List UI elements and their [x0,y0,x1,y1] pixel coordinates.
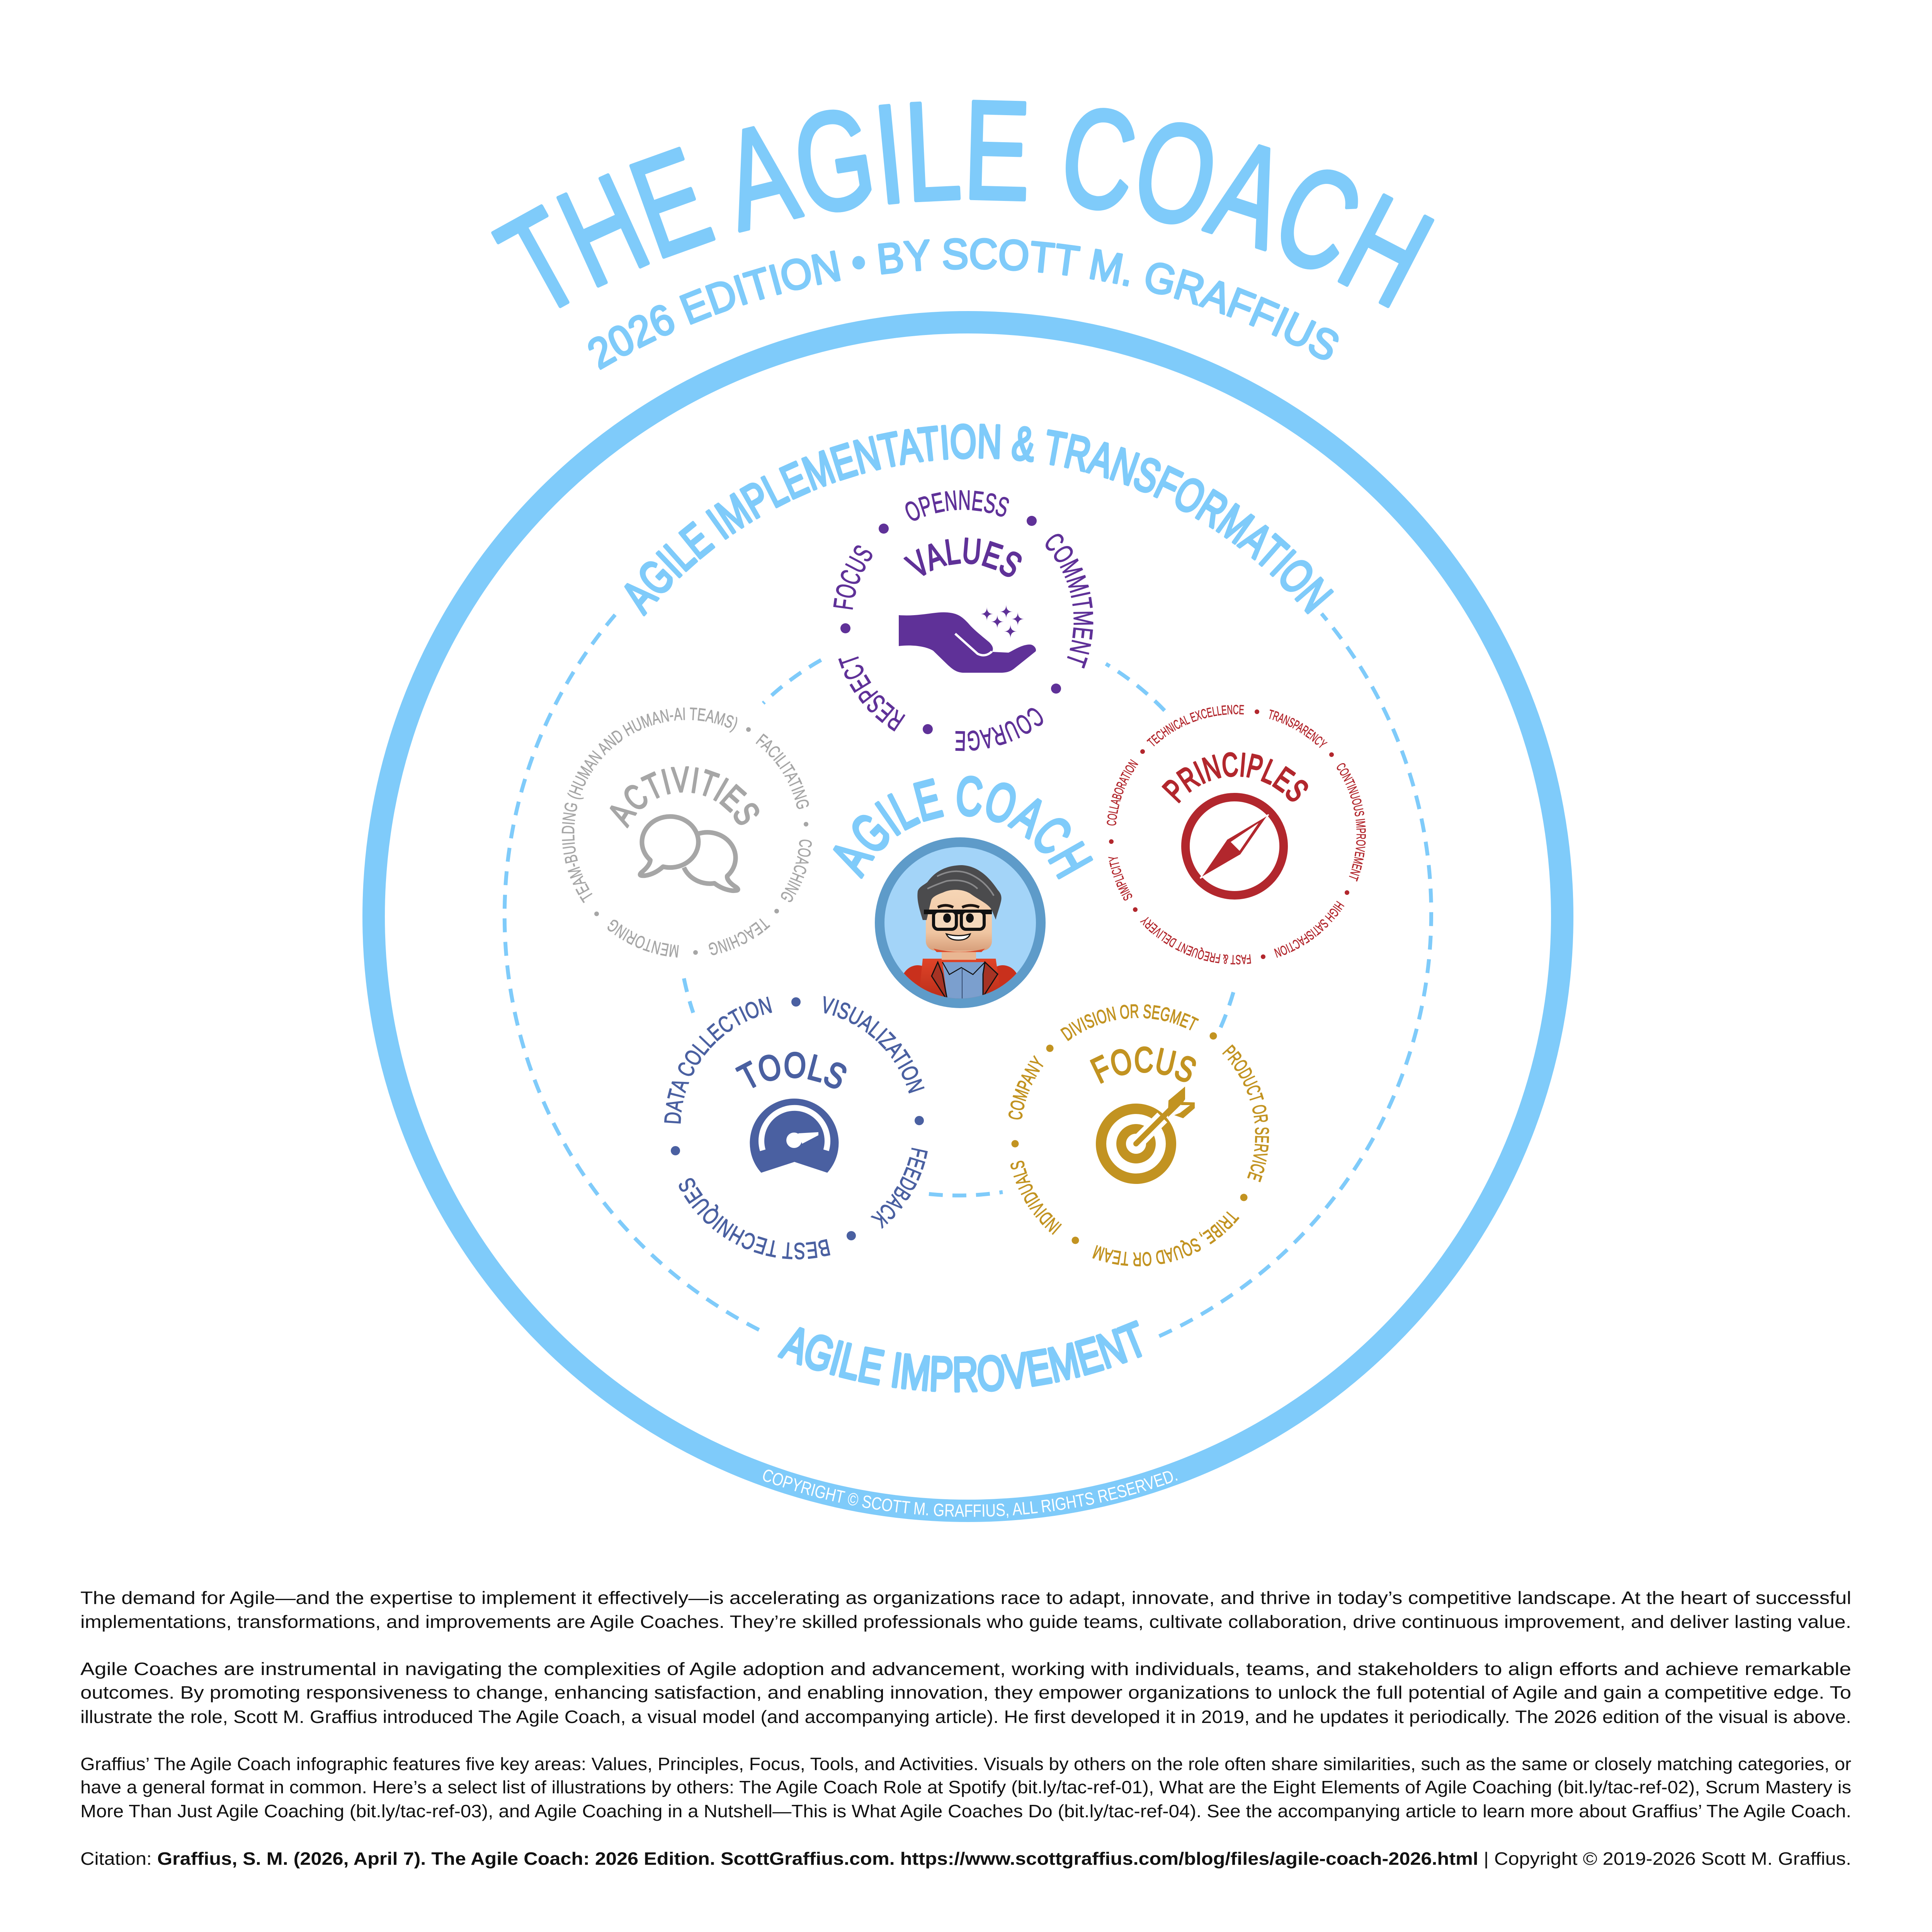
subtitle: 2026 EDITION • BY SCOTT M. GRAFFIUS [579,226,1347,378]
principle: fast and frequent delivery: FAST & FREQUENT DELIVERY [1133,911,1257,980]
tool: visualization: VISUALIZATION [810,977,943,1104]
activity: mentoring: MENTORING [600,913,685,968]
principle: collaboration: COLLABORATION [1100,755,1142,830]
focus: division or segment: DIVISION OR SEGMET [1056,995,1202,1046]
tool: best techniques: BEST TECHNIQUES [660,1167,841,1288]
avatar: agile coach figure [875,837,1046,1008]
heading: agile implementation and transformation: AGILE IMPLEMENTATION & TRANSFORMATION [612,415,1342,622]
icon: compass [1185,797,1284,895]
dashed circle: outer path [505,614,1431,1336]
heading: agile improvement: AGILE IMPROVEMENT [774,1312,1154,1403]
value: openness: OPENNESS [900,482,1014,529]
heading: principles: PRINCIPLES [1156,746,1315,809]
separator dots [1109,709,1349,959]
text block: paragraph 2 [80,1659,1851,1727]
icon: open hand with sparkles [899,605,1036,673]
text block: paragraph 3: More Than Just Agile Coaching (bit.ly/tac-ref-03), and Agile Coaching in a Nutshell—This is What Agile Coaches Do (bit.ly/tac-ref-04). See the accompanying article to learn more about Graffius’ The Agile Coach. [80,1801,1851,1821]
panel: focus [1000,995,1285,1286]
panel: tools [637,973,943,1288]
separator dots [671,997,924,1240]
dashed connectors between areas [684,660,1236,1196]
icon: gauge [750,1099,838,1173]
value: commitment: COMMITMENT [1035,523,1110,676]
text block: paragraph 1: implementations, transformations, and improvements are Agile Coaches. They’re skilled professionals who guide teams, cultivate collaboration, drive continuous improvement, and deliver lasting value. [80,1612,1851,1632]
focus: product or service: PRODUCT OR SERVICE [1216,1037,1285,1188]
icon: target with arrow [1101,1087,1195,1179]
tool: feedback: FEEDBACK [863,1139,940,1237]
focus: tribe, squad or team: TRIBE, SQUAD OR TEAM [1086,1203,1249,1286]
principle: transparency: TRANSPARENCY [1264,703,1332,753]
separator dots [1012,1032,1247,1244]
panel: principles [1100,692,1374,980]
principle: simplicity: SIMPLICITY [1104,852,1136,904]
text block: paragraph 2: illustrate the role, Scott M. Graffius introduced The Agile Coach, a visual model (and accompanying article). He first developed it in 2019, and he updates it periodically. The 2026 edition of the visual is above. [80,1707,1851,1727]
outer ring [374,322,1562,1511]
heading: agile coach: AGILE COACH [818,763,1105,888]
heading: tools: TOOLS [732,1045,853,1097]
value: respect: RESPECT [826,643,916,742]
principle: technical excellence: TECHNICAL EXCELLENCE [1141,692,1249,752]
text block: paragraph 2: Agile Coaches are instrumental in navigating the complexities of Agile adoption and advancement, working with individuals, teams, and stakeholders to align efforts and achieve remarkable [80,1659,1851,1679]
text block: paragraph 3 [80,1754,1851,1821]
activity: team-building: TEAM-BUILDING (HUMAN AND HUMAN-AI TEAMS) [508,654,745,909]
value: courage: COURAGE [945,697,1052,765]
value: focus: FOCUS [823,538,882,618]
focus: individuals: INDIVIDUALS [1000,1153,1069,1242]
panel: values [823,482,1110,765]
principle: high satisfaction: HIGH SATISFACTION [1269,896,1351,966]
text block: paragraph 3: Graffius’ The Agile Coach infographic features five key areas: Values, Principles, Focus, Tools, and Activities. Visuals by others on the role often share similarities, such as the same or closely matching categories, or [80,1754,1851,1774]
heading: focus: FOCUS [1085,1040,1202,1091]
activity: coaching: COACHING [775,834,820,908]
text block: paragraph 1: The demand for Agile—and the expertise to implement it effectively—is accelerating as organizations race to adapt, innovate, and thrive in today’s competitive landscape. At the heart of successful [80,1588,1851,1608]
citation: Citation: Graffius, S. M. (2026, April 7). The Agile Coach: 2026 Edition. ScottGraffius.com. https://www.scottgraffius.com/blog/files/agile-coach-2026.html | Copyright © 2019-2026 Scott M. Graffius. [80,1849,1851,1869]
activity: teaching: TEACHING [702,912,775,964]
tool: data collection: DATA COLLECTION [637,973,784,1137]
icon: speech bubbles [640,816,738,891]
heading: values: VALUES [900,531,1029,586]
text block: paragraph 1 [80,1588,1851,1632]
text block: paragraph 2: outcomes. By promoting responsiveness to change, enhancing satisfaction, and enabling innovation, they empower organizations to unlock the full potential of Agile and gain a competitive edge. To [80,1682,1851,1702]
text block: paragraph 3: have a general format in common. Here’s a select list of illustrations by others: The Agile Coach Role at Spotify (bit.ly/tac-ref-01), What are the Eight Elements of Agile Coaching (bit.ly/tac-ref-02), Scrum Mastery is [80,1777,1851,1797]
copyright on ring: COPYRIGHT © SCOTT M. GRAFFIUS, ALL RIGHTS RESERVED. [760,1464,1180,1520]
activity: facilitating: FACILITATING [749,726,820,816]
separator dots [594,727,808,955]
focus: company: COMPANY [1000,1051,1051,1126]
principle: continuous improvement: CONTINUOUS IMPROVEMENT [1332,759,1374,884]
separator dots [840,516,1061,734]
panel: activities [508,654,820,968]
heading: activities: ACTIVITIES [600,760,767,832]
title: THE AGILE COACH [474,66,1456,345]
